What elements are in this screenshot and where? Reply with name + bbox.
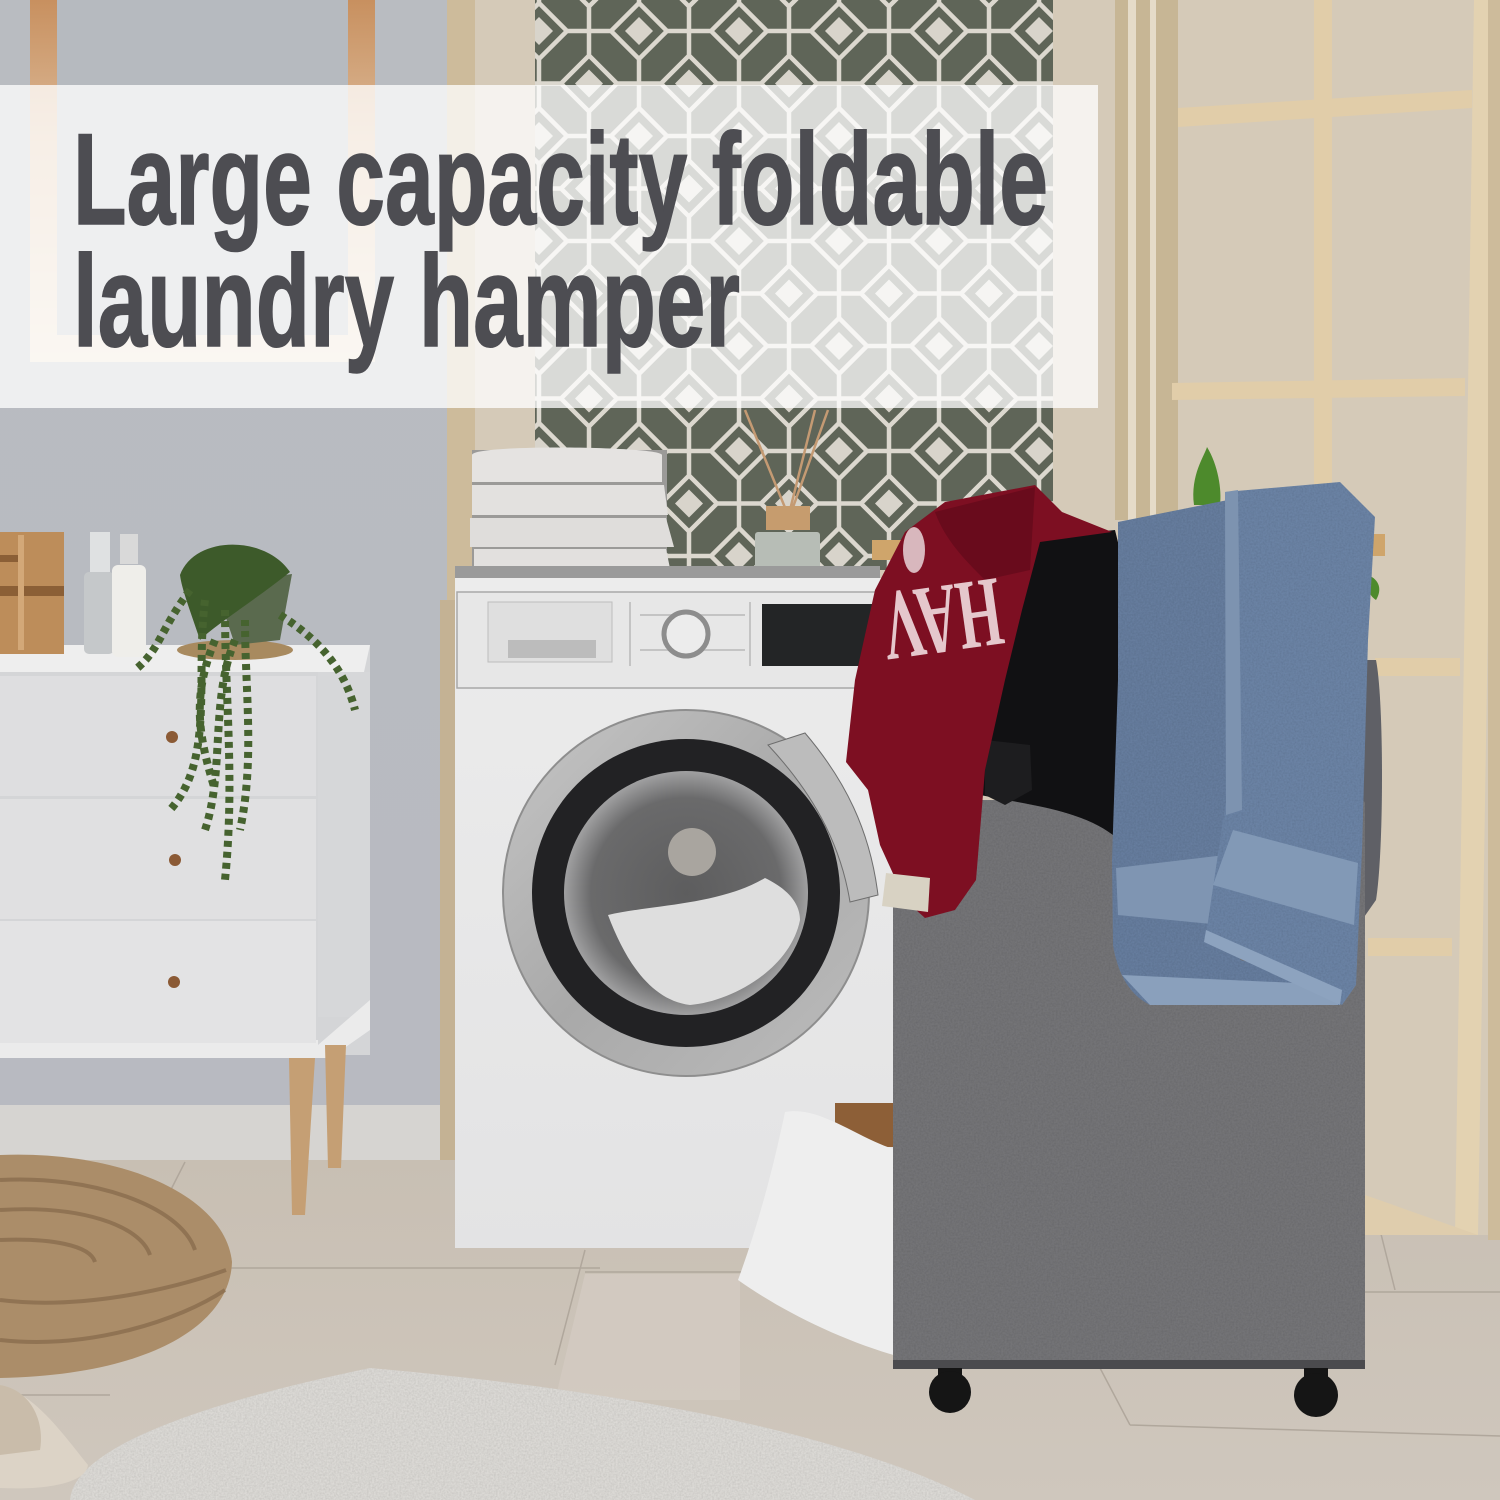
bottles bbox=[84, 532, 146, 657]
left caster bbox=[929, 1368, 971, 1413]
blue towel front layer bbox=[1204, 482, 1375, 1005]
floor tiles bbox=[0, 1160, 1500, 1500]
blue towel back layer bbox=[1112, 500, 1345, 1005]
title bbox=[73, 106, 1048, 374]
potted plant with hanging vines bbox=[135, 545, 355, 880]
drawer knobs bbox=[166, 731, 181, 988]
slipper bbox=[0, 1385, 88, 1488]
green leaves bbox=[1193, 447, 1379, 600]
dresser bbox=[0, 645, 370, 1215]
wood rail ends bbox=[872, 534, 1385, 560]
left grey wall bbox=[0, 0, 460, 1120]
hamper side panel bbox=[1362, 660, 1382, 920]
wooden crate bbox=[0, 532, 64, 654]
door handle bbox=[768, 733, 878, 902]
woven pouf bbox=[0, 1155, 232, 1378]
folding screen bbox=[1115, 0, 1500, 1240]
right caster bbox=[1294, 1368, 1338, 1417]
crest bbox=[903, 527, 925, 573]
back wall and folding screen backdrop bbox=[440, 0, 1500, 1240]
red hoodie bbox=[846, 485, 1112, 918]
reed diffuser bbox=[745, 410, 828, 576]
letters: HAV bbox=[875, 556, 1009, 683]
hamper bbox=[872, 447, 1385, 1417]
garment tag bbox=[882, 873, 930, 912]
translucent title banner bbox=[0, 85, 1098, 408]
black jacket bbox=[975, 530, 1132, 835]
baseboard bbox=[0, 1105, 450, 1165]
door ring bbox=[503, 710, 869, 1076]
folded towel stack bbox=[470, 447, 674, 578]
patterned wall tapestry bbox=[535, 0, 1053, 570]
basket with white towel bbox=[738, 1103, 897, 1356]
washing machine bbox=[455, 566, 895, 1248]
dresser legs bbox=[289, 1045, 346, 1215]
title: laundry hamper bbox=[73, 228, 740, 374]
floor rug bbox=[70, 1368, 975, 1500]
control panel bbox=[457, 592, 882, 688]
title: Large capacity foldable bbox=[73, 106, 1048, 252]
wooden picture frame bbox=[30, 0, 375, 362]
